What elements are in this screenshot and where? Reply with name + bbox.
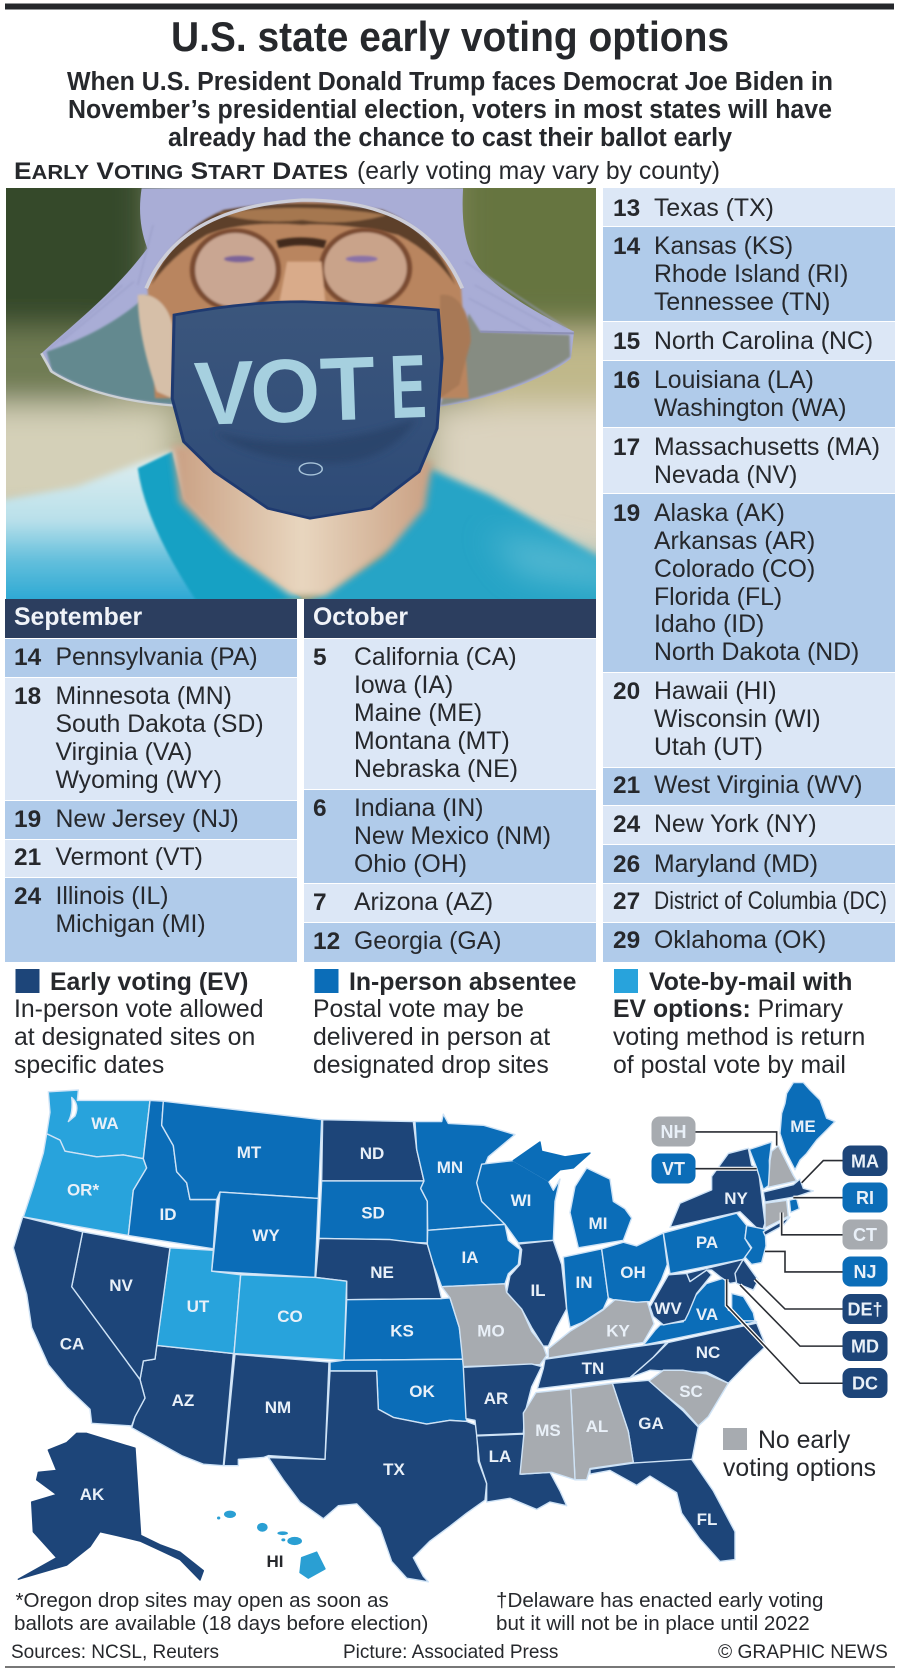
September column: New Jersey (NJ) bbox=[56, 806, 239, 833]
legend: early voting: specific dates bbox=[14, 1052, 164, 1079]
September column: 21 bbox=[14, 844, 41, 871]
October continued column: Texas (TX) bbox=[654, 195, 774, 222]
legend: early voting: In-person vote allowed bbox=[14, 996, 264, 1023]
state labels: MS bbox=[535, 1421, 561, 1440]
October continued column: New York (NY) bbox=[654, 811, 817, 838]
legend: in-person absentee bbox=[313, 969, 576, 1079]
label boxes for small states: RI bbox=[856, 1188, 874, 1208]
October continued column: Florida (FL) bbox=[654, 584, 782, 611]
October column: Arizona (AZ) bbox=[354, 889, 493, 916]
state labels: MT bbox=[237, 1143, 262, 1162]
September column: Michigan (MI) bbox=[56, 911, 206, 938]
October column bbox=[304, 599, 596, 962]
October column: Indiana (IN) bbox=[354, 795, 484, 822]
legend: vote-by-mail: EV options: Primary bbox=[613, 996, 844, 1023]
October continued column: Rhode Island (RI) bbox=[654, 261, 848, 288]
October continued column: Arkansas (AR) bbox=[654, 528, 815, 555]
October continued column: Maryland (MD) bbox=[654, 851, 818, 878]
September column bbox=[5, 599, 297, 962]
September column: Wyoming (WY) bbox=[56, 767, 222, 794]
October column: 7 bbox=[313, 889, 327, 916]
September column: Virginia (VA) bbox=[56, 739, 192, 766]
state labels: LA bbox=[489, 1447, 511, 1466]
October continued column: Hawaii (HI) bbox=[654, 678, 777, 705]
September column: Vermont (VT) bbox=[56, 844, 203, 871]
US map bbox=[13, 1083, 888, 1582]
footnote: Oregon: ballots are available (18 days before election) bbox=[14, 1612, 428, 1635]
state labels: IA bbox=[462, 1248, 478, 1267]
leader lines bbox=[695, 1132, 843, 1383]
October continued column: 19 bbox=[613, 500, 640, 527]
legend: vote-by-mail: voting method is return bbox=[613, 1024, 865, 1051]
subtitle bbox=[67, 68, 833, 152]
October column: New Mexico (NM) bbox=[354, 823, 551, 850]
legend: no early voting options: voting options bbox=[723, 1455, 876, 1482]
footnote: Delaware: but it will not be in place until 2022 bbox=[496, 1612, 810, 1635]
subtitle: November’s presidential election, voters in most states will have bbox=[68, 96, 832, 124]
October continued column: 24 bbox=[613, 811, 641, 838]
October column: 5 bbox=[313, 644, 327, 671]
state labels: SC bbox=[679, 1382, 703, 1401]
label boxes for small states: MD bbox=[851, 1336, 879, 1356]
state labels: WI bbox=[511, 1191, 531, 1210]
September column: September bbox=[14, 604, 143, 631]
October continued column: Nevada (NV) bbox=[654, 462, 797, 489]
September column: Minnesota (MN) bbox=[56, 683, 232, 710]
October column: Ohio (OH) bbox=[354, 851, 467, 878]
label boxes for small states: CT bbox=[853, 1225, 877, 1245]
legend: in-person absentee: designated drop sites bbox=[313, 1052, 549, 1079]
October continued column: Wisconsin (WI) bbox=[654, 706, 821, 733]
state labels: UT bbox=[187, 1297, 210, 1316]
section heading: early voting start dates: EARLY VOTING START DATES bbox=[14, 158, 348, 185]
bottom rule bbox=[5, 1666, 895, 1668]
state labels: WY bbox=[252, 1226, 280, 1245]
September column: South Dakota (SD) bbox=[56, 711, 264, 738]
mask lettering: T bbox=[318, 339, 377, 441]
state labels: WV bbox=[654, 1299, 682, 1318]
section heading: early voting start dates bbox=[14, 158, 720, 185]
October column: 6 bbox=[313, 795, 327, 822]
October continued column: Colorado (CO) bbox=[654, 556, 815, 583]
October column: October bbox=[313, 604, 408, 631]
October continued column: 16 bbox=[613, 367, 640, 394]
state labels: FL bbox=[697, 1510, 717, 1529]
label boxes for small states: MA bbox=[851, 1152, 879, 1172]
face and hair bbox=[138, 202, 471, 398]
state labels: OR* bbox=[67, 1180, 99, 1200]
state labels: GA bbox=[638, 1414, 664, 1433]
October continued column: 29 bbox=[613, 927, 640, 954]
shirt bbox=[0, 448, 620, 608]
state labels: AL bbox=[586, 1417, 608, 1436]
October column: Montana (MT) bbox=[354, 728, 510, 755]
state labels: CO bbox=[277, 1307, 303, 1326]
state labels: OH bbox=[620, 1263, 646, 1282]
state labels: NM bbox=[265, 1398, 291, 1417]
state labels: NE bbox=[370, 1263, 394, 1282]
October column: Nebraska (NE) bbox=[354, 756, 518, 783]
state labels: ID bbox=[160, 1205, 176, 1224]
October continued column: 17 bbox=[613, 434, 640, 461]
mask lettering: V bbox=[193, 343, 256, 445]
state labels: AZ bbox=[172, 1391, 194, 1410]
October continued column: Kansas (KS) bbox=[654, 233, 793, 260]
state labels: NY bbox=[724, 1189, 748, 1208]
mask bbox=[172, 302, 442, 518]
mask lettering bbox=[194, 355, 426, 424]
footnote: Delaware bbox=[496, 1589, 823, 1635]
footnote: Delaware: †Delaware has enacted early voting bbox=[496, 1589, 823, 1612]
October continued column: Idaho (ID) bbox=[654, 611, 764, 638]
footnote: Oregon bbox=[14, 1589, 428, 1635]
sources and credits bbox=[11, 1642, 888, 1663]
legend: no early voting options: No early bbox=[758, 1427, 851, 1454]
legend: early voting bbox=[14, 969, 264, 1079]
legend: early voting: Early voting (EV) bbox=[50, 969, 248, 996]
title: U.S. state early voting options bbox=[171, 13, 729, 60]
September column: 19 bbox=[14, 806, 41, 833]
October header bbox=[304, 599, 596, 638]
October column: Iowa (IA) bbox=[354, 672, 453, 699]
legend: no early voting options bbox=[723, 1427, 876, 1482]
label boxes for small states: VT bbox=[662, 1159, 685, 1179]
October continued column: North Dakota (ND) bbox=[654, 639, 859, 666]
October continued column: 14 bbox=[613, 233, 641, 260]
mask lettering: O bbox=[249, 341, 322, 443]
glasses bbox=[192, 230, 409, 309]
October column: 12 bbox=[313, 928, 340, 955]
state labels: CA bbox=[60, 1334, 84, 1354]
October continued column: Massachusetts (MA) bbox=[654, 434, 880, 461]
sources and credits: Sources: NCSL, Reuters bbox=[11, 1642, 219, 1663]
state labels: NV bbox=[109, 1276, 133, 1295]
state labels: MN bbox=[437, 1158, 463, 1177]
state labels: OK bbox=[409, 1382, 435, 1401]
label boxes for small states: DE† bbox=[847, 1300, 883, 1320]
September column: Pennsylvania (PA) bbox=[56, 644, 258, 671]
legend: in-person absentee: In-person absentee bbox=[349, 969, 576, 996]
Hawaii islands bbox=[217, 1511, 325, 1578]
October continued column: 13 bbox=[613, 195, 640, 222]
state labels: MO bbox=[477, 1322, 505, 1340]
October continued column: 26 bbox=[613, 851, 640, 878]
subtitle: already had the chance to cast their ballot early bbox=[168, 124, 733, 152]
September column: 14 bbox=[14, 644, 42, 671]
legend: in-person absentee: delivered in person at bbox=[313, 1024, 550, 1051]
legend: vote-by-mail bbox=[613, 969, 865, 1079]
October continued column: Alaska (AK) bbox=[654, 500, 785, 527]
September column: Illinois (IL) bbox=[56, 883, 168, 910]
state labels: ME bbox=[790, 1117, 816, 1136]
October column: Georgia (GA) bbox=[354, 928, 501, 955]
state labels: AR bbox=[484, 1389, 508, 1408]
footnote: Oregon: *Oregon drop sites may open as soon as bbox=[16, 1589, 389, 1612]
October continued column: 15 bbox=[613, 328, 640, 355]
hat crown and brim bbox=[41, 188, 574, 407]
state labels: TX bbox=[383, 1460, 406, 1479]
section heading: early voting start dates: (early voting may vary by county) bbox=[357, 158, 720, 185]
October continued column: Oklahoma (OK) bbox=[654, 927, 826, 954]
state labels: WA bbox=[91, 1114, 119, 1133]
September header bbox=[5, 599, 297, 638]
October continued column: Tennessee (TN) bbox=[654, 289, 830, 316]
October continued column: Washington (WA) bbox=[654, 395, 846, 422]
state labels: KY bbox=[606, 1322, 630, 1340]
legend: vote-by-mail: Vote-by-mail with bbox=[649, 969, 852, 996]
label boxes for small states: NH bbox=[660, 1122, 686, 1142]
legend: early voting: at designated sites on bbox=[14, 1024, 255, 1051]
October column: California (CA) bbox=[354, 644, 517, 671]
state labels: NC bbox=[696, 1343, 720, 1362]
September column: 18 bbox=[14, 683, 41, 710]
October continued column: Utah (UT) bbox=[654, 734, 763, 761]
October column: Maine (ME) bbox=[354, 700, 482, 727]
state labels bbox=[60, 1114, 816, 1571]
September column: 24 bbox=[14, 883, 42, 910]
state labels: PA bbox=[696, 1233, 718, 1252]
subtitle: When U.S. President Donald Trump faces Democrat Joe Biden in bbox=[67, 68, 833, 96]
sources and credits: Picture: Associated Press bbox=[343, 1642, 558, 1663]
state labels: IN bbox=[576, 1273, 592, 1292]
state labels: ND bbox=[360, 1144, 384, 1163]
label boxes for small states bbox=[652, 1116, 888, 1398]
top rule bbox=[5, 4, 894, 10]
state labels: IL bbox=[530, 1281, 546, 1300]
state labels: VA bbox=[696, 1305, 718, 1324]
October continued column: 20 bbox=[613, 678, 640, 705]
state labels: AK bbox=[80, 1485, 105, 1504]
October continued column bbox=[603, 188, 895, 962]
October continued column: 27 bbox=[613, 888, 640, 915]
October continued column: North Carolina (NC) bbox=[654, 328, 873, 355]
October continued column: Louisiana (LA) bbox=[654, 367, 814, 394]
mask lettering: E bbox=[388, 337, 428, 438]
photo: person wearing VOTE mask and bucket hat bbox=[6, 188, 596, 599]
label boxes for small states: NJ bbox=[853, 1262, 877, 1282]
legend: in-person absentee: Postal vote may be bbox=[313, 996, 524, 1023]
label boxes for small states: DC bbox=[852, 1374, 878, 1394]
state labels: KS bbox=[390, 1322, 414, 1340]
legend: vote-by-mail: of postal vote by mail bbox=[613, 1052, 846, 1079]
October continued column: West Virginia (WV) bbox=[654, 772, 863, 799]
state labels: TN bbox=[582, 1359, 604, 1378]
October continued column: 21 bbox=[613, 772, 640, 799]
state labels: SD bbox=[361, 1204, 385, 1222]
state labels: MI bbox=[589, 1214, 607, 1233]
sources and credits: © GRAPHIC NEWS bbox=[718, 1642, 888, 1663]
neck bbox=[172, 445, 432, 596]
state labels: HI bbox=[266, 1552, 284, 1571]
